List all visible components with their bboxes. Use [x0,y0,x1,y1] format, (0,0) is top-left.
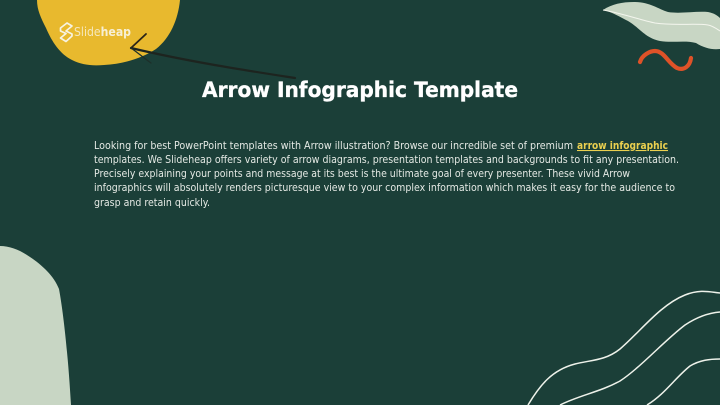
arrow sketch [131,34,295,78]
white wavy lines [528,291,720,405]
title: Arrow Infographic Template [202,78,518,103]
logo: Slideheap [60,23,131,42]
yellow blob [37,0,180,65]
body paragraph: grasp and retain quickly. [94,197,210,209]
body paragraph [94,140,679,209]
leaf decoration [603,2,720,49]
logo: Slideheap: Slideheap [74,24,131,39]
body paragraph: Precisely explaining your points and message at its best is the ultimate goal of every presenter. These vivid Arrow [94,168,630,180]
orange squiggle [640,51,691,69]
body paragraph: arrow infographic [577,140,668,152]
sage blob bottom left [0,246,71,405]
body paragraph: Looking for best PowerPoint templates with Arrow illustration? Browse our incredible set of premium [94,140,573,152]
